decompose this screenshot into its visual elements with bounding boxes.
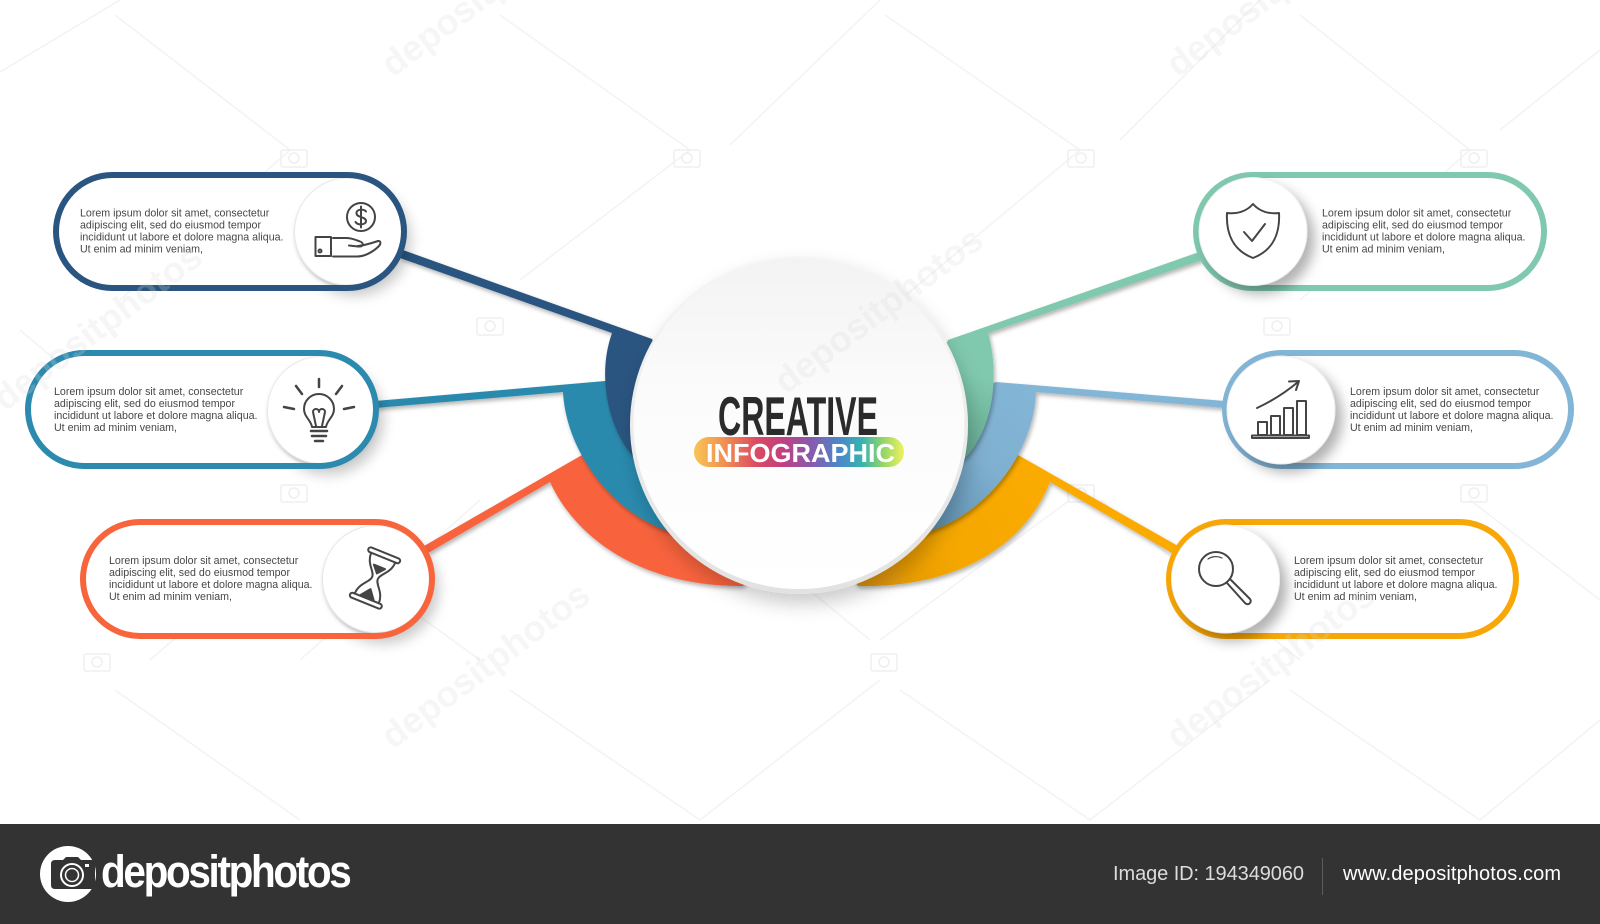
icon: hand holding coin xyxy=(316,203,380,257)
text: top right description: incididunt ut labore et dolore magna aliqua. xyxy=(1322,232,1526,244)
text: middle right description: Lorem ipsum dolor sit amet, consectetur xyxy=(1350,386,1540,398)
title: CREATIVE INFOGRAPHIC: INFOGRAPHIC xyxy=(706,438,895,468)
text: depositphotos wordmark: depositphotos xyxy=(101,847,351,898)
icon: growth bar chart xyxy=(1252,381,1309,438)
segment: orange wedge and connector xyxy=(424,455,760,586)
panel: bottom right pill xyxy=(1169,522,1516,636)
segment: light blue wedge and connector xyxy=(900,382,1225,540)
segment: amber wedge and connector xyxy=(840,455,1178,586)
text: top left description: Ut enim ad minim veniam, xyxy=(80,244,203,256)
watermark text: depositphotos xyxy=(373,573,597,756)
text: top right description: Ut enim ad minim veniam, xyxy=(1322,244,1445,256)
text: bottom right description: incididunt ut labore et dolore magna aliqua. xyxy=(1294,579,1498,591)
panel: top left pill xyxy=(56,175,405,289)
footer bar xyxy=(0,824,1600,924)
segment: dark blue wedge and connector xyxy=(400,249,680,470)
text: top left description: adipiscing elit, sed do eiusmod tempor xyxy=(80,220,261,232)
text: middle left description: Ut enim ad minim veniam, xyxy=(54,422,177,434)
text: middle left description: Lorem ipsum dolor sit amet, consectetur xyxy=(54,386,244,398)
text: top right description: adipiscing elit, sed do eiusmod tempor xyxy=(1322,220,1503,232)
text: bottom left description: adipiscing elit, sed do eiusmod tempor xyxy=(109,567,290,579)
text: middle right description: Ut enim ad minim veniam, xyxy=(1350,422,1473,434)
watermark text: depositphotos xyxy=(766,218,990,401)
panel: middle left pill xyxy=(28,353,378,468)
segment: teal wedge and connector xyxy=(375,381,700,540)
icon: hourglass xyxy=(349,547,401,609)
text: bottom right description: Ut enim ad minim veniam, xyxy=(1294,591,1417,603)
text: website url: www.depositphotos.com xyxy=(1342,863,1561,885)
panel: central circle xyxy=(630,256,968,594)
text: middle left description: adipiscing elit, sed do eiusmod tempor xyxy=(54,398,235,410)
text: middle right description: incididunt ut labore et dolore magna aliqua. xyxy=(1350,410,1554,422)
title: CREATIVE INFOGRAPHIC: CREATIVE xyxy=(718,385,878,447)
text: top left description: incididunt ut labore et dolore magna aliqua. xyxy=(80,232,284,244)
watermark text xyxy=(0,0,1382,756)
text: middle right description: adipiscing elit, sed do eiusmod tempor xyxy=(1350,398,1531,410)
text: bottom left description: incididunt ut labore et dolore magna aliqua. xyxy=(109,579,312,591)
watermark text: depositphotos xyxy=(1158,573,1382,756)
text: bottom left description: Ut enim ad minim veniam, xyxy=(109,591,232,603)
panel: bottom left pill xyxy=(83,522,433,637)
text: top left description: Lorem ipsum dolor sit amet, consectetur xyxy=(80,208,270,220)
icon: shield with check xyxy=(1227,204,1279,258)
text: image id: Image ID: 194349060 xyxy=(1113,863,1304,885)
panel: middle right pill xyxy=(1225,353,1571,466)
icon: light bulb xyxy=(284,379,354,441)
segment: green wedge and connector xyxy=(920,251,1202,470)
icon: depositphotos logo camera xyxy=(40,846,96,902)
text: bottom right description: adipiscing elit, sed do eiusmod tempor xyxy=(1294,567,1475,579)
panel: top right pill xyxy=(1196,175,1544,288)
text: bottom right description: Lorem ipsum dolor sit amet, consectetur xyxy=(1294,555,1484,567)
icon: magnifying glass xyxy=(1199,552,1251,604)
text: bottom left description: Lorem ipsum dolor sit amet, consectetur xyxy=(109,555,299,567)
title: CREATIVE INFOGRAPHIC xyxy=(694,385,904,468)
text: top right description: Lorem ipsum dolor sit amet, consectetur xyxy=(1322,208,1512,220)
text: middle left description: incididunt ut labore et dolore magna aliqua. xyxy=(54,410,258,422)
